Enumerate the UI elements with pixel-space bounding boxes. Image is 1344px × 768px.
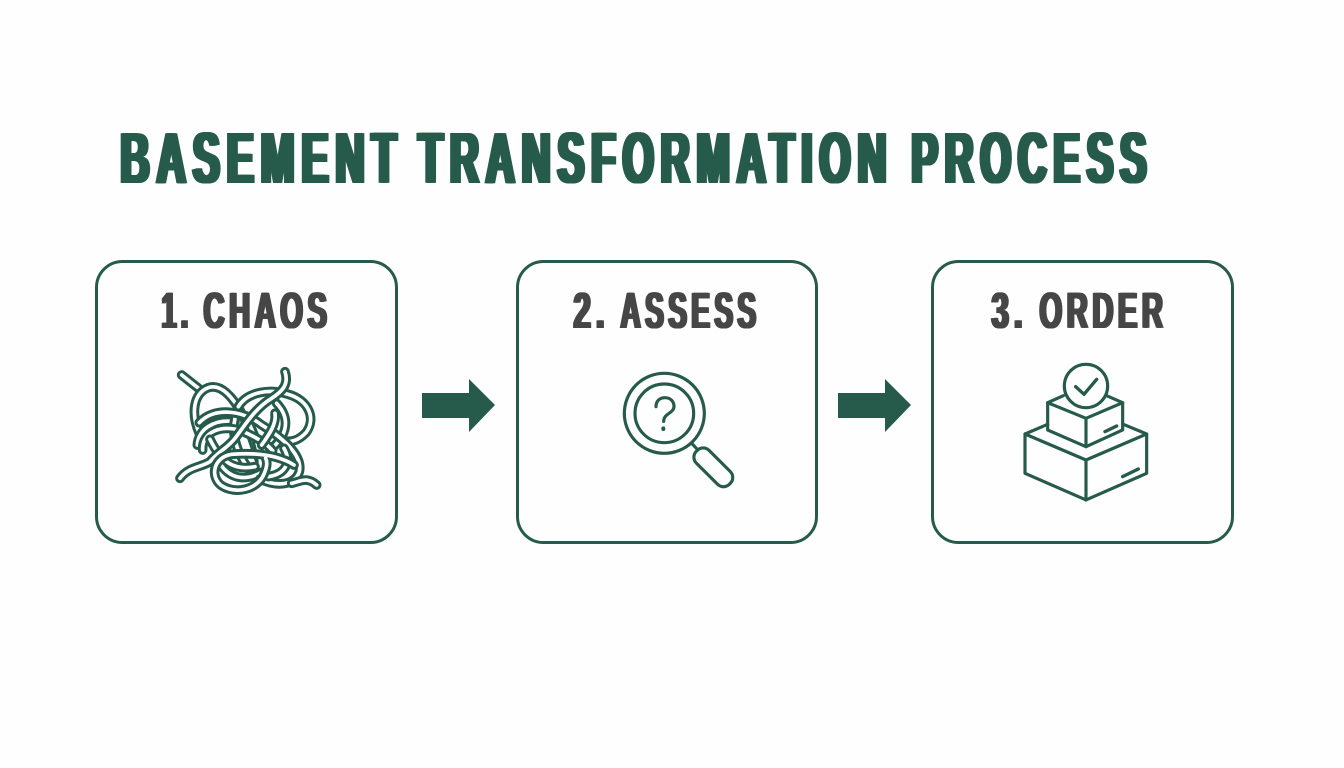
- heading: 3. order: 3.: [992, 282, 1028, 339]
- heading: 1. chaos: [162, 282, 332, 339]
- icon: magnifying glass with question mark: [624, 373, 736, 490]
- icon: tangled rope: [180, 372, 317, 490]
- icon: stacked boxes with check mark: [1025, 364, 1147, 500]
- heading: 1. chaos: 1.: [162, 282, 193, 339]
- arrow: chaos to assess: [422, 379, 495, 432]
- title: TRANSFORMATION: [419, 118, 894, 199]
- panel: assess: [518, 262, 816, 542]
- heading: 3. order: [992, 282, 1168, 339]
- title: BASEMENT: [121, 118, 404, 199]
- arrow: assess to order: [838, 379, 911, 432]
- title: [121, 118, 1154, 199]
- heading: 2. assess: 2.: [574, 282, 610, 339]
- heading: 2. assess: ASSESS: [621, 282, 761, 339]
- heading: 3. order: ORDER: [1040, 282, 1168, 339]
- heading: 1. chaos: CHAOS: [204, 282, 332, 339]
- panel: chaos: [96, 262, 396, 542]
- heading: 2. assess: [574, 282, 761, 339]
- panel: order: [932, 262, 1232, 542]
